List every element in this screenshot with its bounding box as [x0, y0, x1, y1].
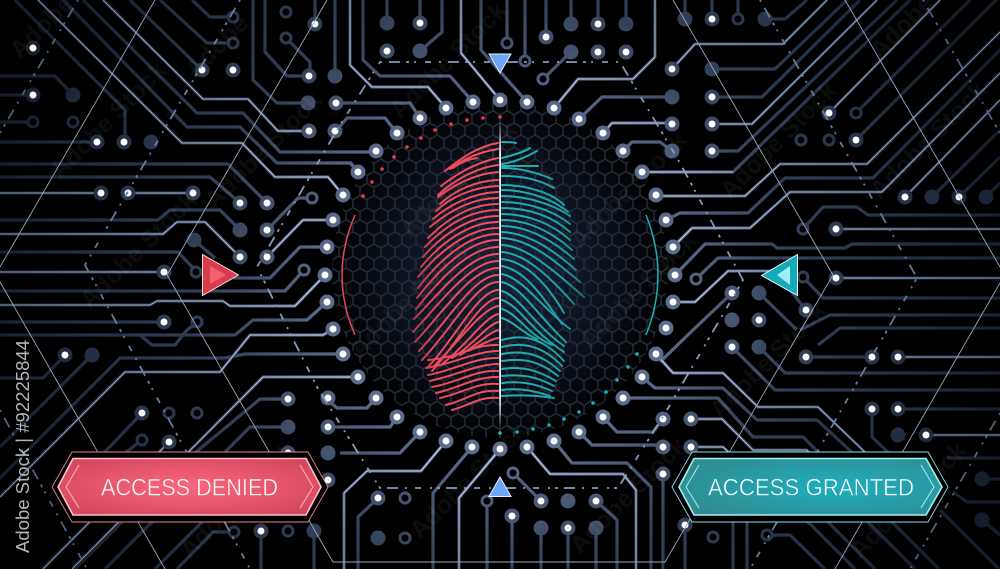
stock watermarks: Adobe Stock: [714, 76, 842, 204]
stock watermarks: Adobe Stock: [199, 86, 327, 214]
ring pads: [28, 7, 861, 543]
stock watermarks: Adobe Stock: [564, 431, 692, 559]
label: access denied: ACCESS DENIED: [101, 474, 278, 502]
badge: access granted: [672, 452, 948, 522]
stock id text: Adobe Stock | #92225844: [13, 340, 33, 553]
teal scan arc: [646, 215, 658, 335]
stock watermarks: Adobe Stock: [44, 56, 172, 184]
fingerprint: red half: [413, 143, 498, 410]
triangle: denied marker: [202, 254, 238, 296]
badge: access denied: [52, 452, 328, 522]
scanner hexagon grid: [330, 100, 670, 440]
triangle: bottom marker: [489, 477, 511, 496]
stock watermarks: Adobe Stock: [844, 436, 972, 564]
fingerprint: teal half: [502, 142, 584, 398]
stock watermarks: Adobe Stock: [704, 296, 832, 424]
stock watermarks: Adobe Stock: [564, 126, 692, 254]
stock watermarks: Adobe Stock: [344, 236, 472, 364]
stock watermarks: Adobe Stock: [384, 0, 512, 124]
stock watermarks: Adobe Stock: [74, 186, 202, 314]
triangle: granted marker: [762, 254, 798, 296]
stock watermarks: Adobe: [179, 9, 254, 84]
stock watermarks: Adobe Stock: [574, 226, 702, 354]
label: access granted: ACCESS GRANTED: [708, 474, 914, 502]
red dotted arc: [361, 115, 502, 198]
stock watermarks: Adobe Stock: [174, 436, 302, 564]
stock watermarks: Adobe Stock: [394, 116, 522, 244]
triangle: top marker: [489, 54, 511, 73]
teal dotted arc: [498, 352, 639, 435]
stock watermarks: Adobe Stock: [864, 76, 992, 204]
centre scan line: [499, 122, 501, 428]
red scan arc: [342, 215, 355, 335]
stock watermarks: Adobe Stock: [404, 416, 532, 544]
